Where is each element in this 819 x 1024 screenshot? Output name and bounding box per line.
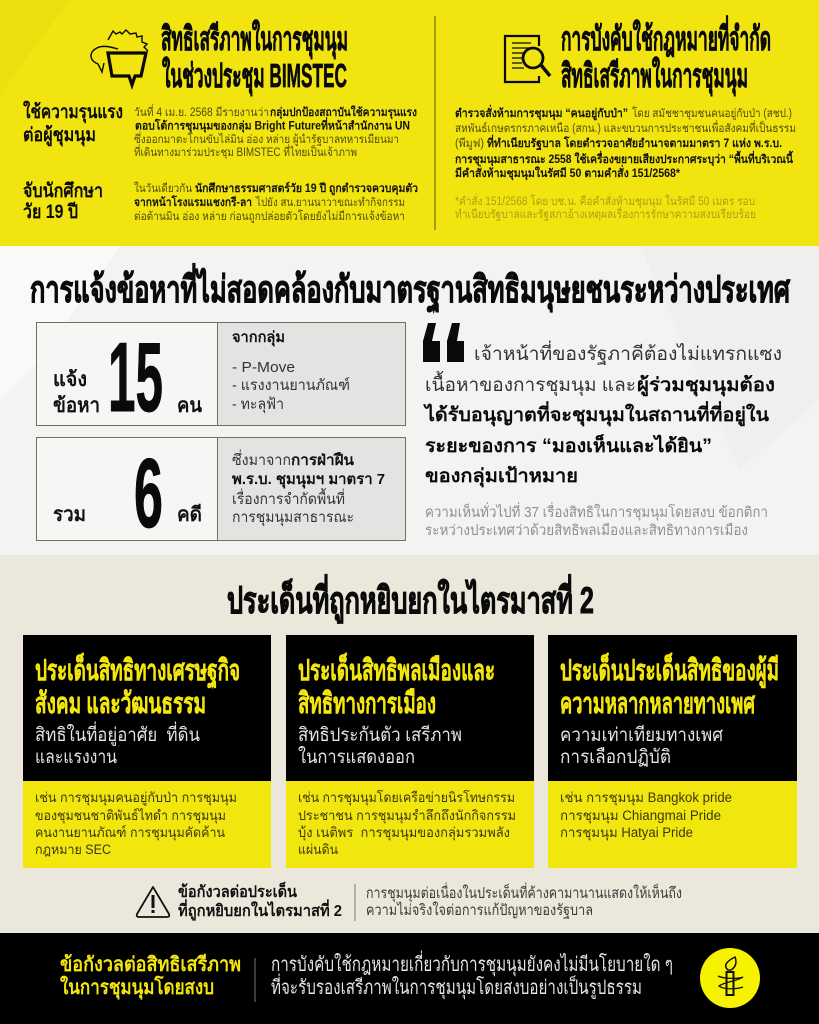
list: groups: - P-Move xyxy=(232,359,295,376)
card title: ประเด็นสิทธิทางเศรษฐกิจ xyxy=(35,652,240,689)
label: total: รวม xyxy=(53,504,86,526)
text: violence details: ตอบโต้การชุมนุมของกลุ่ม Bright Futureที่หน้าสำนักงาน UN xyxy=(135,116,410,134)
text: violation: พ.ร.บ. ชุมนุมฯ มาตรา 7 xyxy=(232,471,385,489)
card subtitle xyxy=(35,721,200,768)
text: quote: เนื้อหาของการชุมนุม และ xyxy=(425,371,636,397)
card examples xyxy=(298,789,516,857)
card examples: ประชาชน การชุมนุมรำลึกถึงนักกิจกรรม xyxy=(298,808,516,824)
heading: rights in BIMSTEC: ในช่วงประชุม BIMSTEC xyxy=(162,56,347,97)
card examples: แผ่นดิน xyxy=(298,842,338,857)
card: civil rights xyxy=(286,635,534,868)
card subtitle: การเลือกปฏิบัติ xyxy=(560,747,671,768)
text: source xyxy=(425,502,768,539)
text: quote xyxy=(423,340,782,488)
card title: สังคม และวัฒนธรรม xyxy=(35,688,206,720)
concern: issues xyxy=(137,880,682,922)
footer heading: ข้อกังวลต่อสิทธิเสรีภาพ xyxy=(60,953,241,976)
list: groups: - แรงงานยานภัณฑ์ xyxy=(232,377,350,394)
heading: rights in BIMSTEC xyxy=(161,19,348,97)
icon: warning triangle xyxy=(137,887,169,917)
panel: 15 charged xyxy=(36,322,406,432)
footer heading: ในการชุมนุมโดยสงบ xyxy=(60,975,214,1000)
card examples xyxy=(560,790,732,841)
text: violation xyxy=(232,449,385,527)
footer text xyxy=(271,950,673,1000)
label: charged xyxy=(53,368,100,417)
list: groups xyxy=(232,329,350,414)
card examples: กฎหมาย SEC xyxy=(35,842,111,857)
text: police order: ที่ทำเนียบรัฐบาล โดยตำรวจอาศัยอำนาจตามมาตรา 7 แห่ง พ.ร.บ. xyxy=(487,134,782,151)
text: police order xyxy=(455,104,796,181)
text: violence details: ซึ่งออกมาตะโกนขับไล่มิน อ่อง หล่าย ผู้นำรัฐบาลทหารเมียนมา xyxy=(134,131,399,146)
text: quote: ได้รับอนุญาตที่จะชุมนุมในสถานที่ที่อยู่ใน xyxy=(423,401,769,427)
label: charged: แจ้ง xyxy=(53,368,87,391)
panel: 6 cases xyxy=(36,438,406,548)
text: source: ระหว่างประเทศว่าด้วยสิทธิพลเมืองและสิทธิทางการเมือง xyxy=(425,522,748,539)
footer text: ที่จะรับรองเสรีภาพในการชุมนุมโดยสงบอย่างเป็นรูปธรรม xyxy=(271,973,642,1000)
card subtitle: สิทธิประกันตัว เสรีภาพ xyxy=(298,724,462,746)
icon: document with magnifier xyxy=(505,36,550,82)
subheading: violence: ใช้ความรุนแรง xyxy=(23,100,123,124)
concern heading: ข้อกังวลต่อประเด็น xyxy=(178,880,297,901)
card title xyxy=(35,652,240,720)
heading: law enforcement xyxy=(561,15,771,97)
text: violence details: ที่เดินทางมาร่วมประชุม BIMSTEC ที่ไทยเป็นเจ้าภาพ xyxy=(134,144,357,159)
text: violence details: วันที่ 4 เม.ย. 2568 มีรายงานว่า xyxy=(134,104,269,119)
text: violation: เรื่องการจำกัดพื้นที่ xyxy=(232,488,345,508)
footnote xyxy=(455,193,756,221)
text: student details: ไปยัง สน.ยานนาวาขณะทำกิจกรรม xyxy=(255,196,405,209)
number: 6: 6 xyxy=(134,438,163,548)
text: quote: ของกลุ่มเป้าหมาย xyxy=(425,465,578,488)
card subtitle: ความเท่าเทียมทางเพศ xyxy=(560,724,723,746)
text: violation: การชุมนุมสาธารณะ xyxy=(232,509,354,527)
card title: สิทธิทางการเมือง xyxy=(298,688,436,720)
footer xyxy=(60,948,760,1008)
subheading: student: จับนักศึกษา xyxy=(23,180,103,202)
subheading: student: วัย 19 ปี xyxy=(23,201,78,223)
subheading: violence: ต่อผู้ชุมนุม xyxy=(23,124,96,147)
label: charged: ข้อหา xyxy=(53,394,100,417)
footer heading xyxy=(60,953,241,1000)
text: student details xyxy=(134,181,418,223)
card: gender diversity xyxy=(548,635,797,868)
card examples: เช่น การชุมนุม Bangkok pride xyxy=(560,790,732,806)
text: violation: การฝ่าฝืน xyxy=(291,452,355,469)
icon: Amnesty candle logo xyxy=(700,948,760,1008)
text: student details: ในวันเดียวกัน xyxy=(134,182,192,195)
card examples: การชุมนุม Hatyai Pride xyxy=(560,825,693,841)
text: student details: ต่อต้านมิน อ่อง หล่าย ก่อนถูกปล่อยตัวโดยยังไม่มีการแจ้งข้อหา xyxy=(134,209,405,223)
text: police order: มีคำสั่งห้ามชุมนุมในรัศมี 50 ตามคำสั่ง 151/2568* xyxy=(455,164,680,181)
card: economic rights xyxy=(23,635,271,868)
card title: ประเด็นสิทธิพลเมืองและ xyxy=(298,652,495,687)
icon: speech bubbles xyxy=(91,30,148,85)
heading: rights in BIMSTEC: สิทธิเสรีภาพในการชุมนุม xyxy=(161,19,348,60)
concern text: การชุมนุมต่อเนื่องในประเด็นที่ค้างคามานานแสดงให้เห็นถึง xyxy=(366,882,682,903)
heading: issues: ประเด็นที่ถูกหยิบยกในไตรมาสที่ 2 xyxy=(227,574,594,624)
text: violence details: กลุ่มปกป้องสถาบันใช้ความรุนแรง xyxy=(270,105,417,120)
number: 15: 15 xyxy=(108,322,163,432)
text: student details: จากหน้าโรงแรมแชงกรี-ลา xyxy=(134,194,252,209)
card subtitle: สิทธิในที่อยู่อาศัย ที่ดิน xyxy=(35,721,200,746)
text: police order: (พีมูฟ) xyxy=(455,137,484,150)
text: source: ความเห็นทั่วไปที่ 37 เรื่องสิทธิในการชุมนุมโดยสงบ ข้อกติกา xyxy=(425,502,768,521)
subheading: violence xyxy=(23,100,123,147)
card subtitle: และแรงงาน xyxy=(35,747,117,768)
list: groups: - ทะลุฟ้า xyxy=(232,396,284,414)
text: quote: ผู้ร่วมชุมนุมต้อง xyxy=(637,374,775,397)
subheading: student xyxy=(23,180,103,223)
card title xyxy=(560,652,779,720)
concern heading: ที่ถูกหยิบยกในไตรมาสที่ 2 xyxy=(178,899,342,922)
quote block xyxy=(423,323,782,539)
card examples: ของชุมชนชาติพันธ์ไทดำ การชุมนุม xyxy=(35,807,226,824)
card subtitle xyxy=(560,724,723,768)
text: quote: เจ้าหน้าที่ของรัฐภาคีต้องไม่แทรกแซง xyxy=(474,340,782,365)
list: groups: จากกลุ่ม xyxy=(232,329,285,347)
concern text: ความไม่จริงใจต่อการแก้ปัญหาของรัฐบาล xyxy=(366,901,593,919)
card examples: การชุมนุม Chiangmai Pride xyxy=(560,808,721,824)
concern text xyxy=(366,882,682,919)
unit: cases: คดี xyxy=(177,503,202,526)
card subtitle: ในการแสดงออก xyxy=(298,746,415,768)
unit: people: คน xyxy=(177,395,202,417)
card examples: คนงานยานภัณฑ์ การชุมนุมคัดค้าน xyxy=(35,824,225,841)
card examples: บุ้ง เนติพร การชุมนุมของกลุ่มรวมพลัง xyxy=(298,825,510,841)
card title xyxy=(298,652,495,720)
text: violence details xyxy=(134,104,417,159)
icon: quote mark xyxy=(423,323,464,362)
text: quote: ระยะของการ “มองเห็นและได้ยิน” xyxy=(425,433,712,457)
concern heading xyxy=(178,880,342,922)
text: student details: นักศึกษาธรรมศาสตร์วัย 19 ปี ถูกตำรวจควบคุมตัว xyxy=(195,181,418,196)
card examples: เช่น การชุมนุมโดยเครือข่ายนิรโทษกรรม xyxy=(298,789,515,806)
panel: header left xyxy=(23,19,418,223)
text: police order: การชุมนุมสาธารณะ 2558 ใช้เครื่องขยายเสียงประกาศระบุว่า “พื้นที่บริเวณนี้ xyxy=(455,150,794,167)
text: violation: ซึ่งมาจาก xyxy=(232,449,291,469)
footnote: *คำสั่ง 151/2568 โดย บช.น. คือคำสั่งห้ามชุมนุม ในรัศมี 50 เมตร รอบ xyxy=(455,193,755,208)
card examples xyxy=(35,790,237,857)
card examples: เช่น การชุมนุมคนอยู่กับป่า การชุมนุม xyxy=(35,790,237,806)
panel: header right xyxy=(455,15,796,221)
footer text: การบังคับใช้กฎหมายเกี่ยวกับการชุมนุมยังคงไม่มีนโยบายใด ๆ xyxy=(271,950,673,977)
footnote: ทำเนียบรัฐบาลและรัฐสภาอ้างเหตุผลเรื่องการรักษาความสงบเรียบร้อย xyxy=(455,206,756,221)
text: police order: ตำรวจสั่งห้ามการชุมนุม “คนอยู่กับป่า” xyxy=(455,104,628,121)
card subtitle xyxy=(298,724,462,768)
text: police order: โดย สมัชชาชุมชนคนอยู่กับป่า (สชป.) xyxy=(632,106,792,120)
